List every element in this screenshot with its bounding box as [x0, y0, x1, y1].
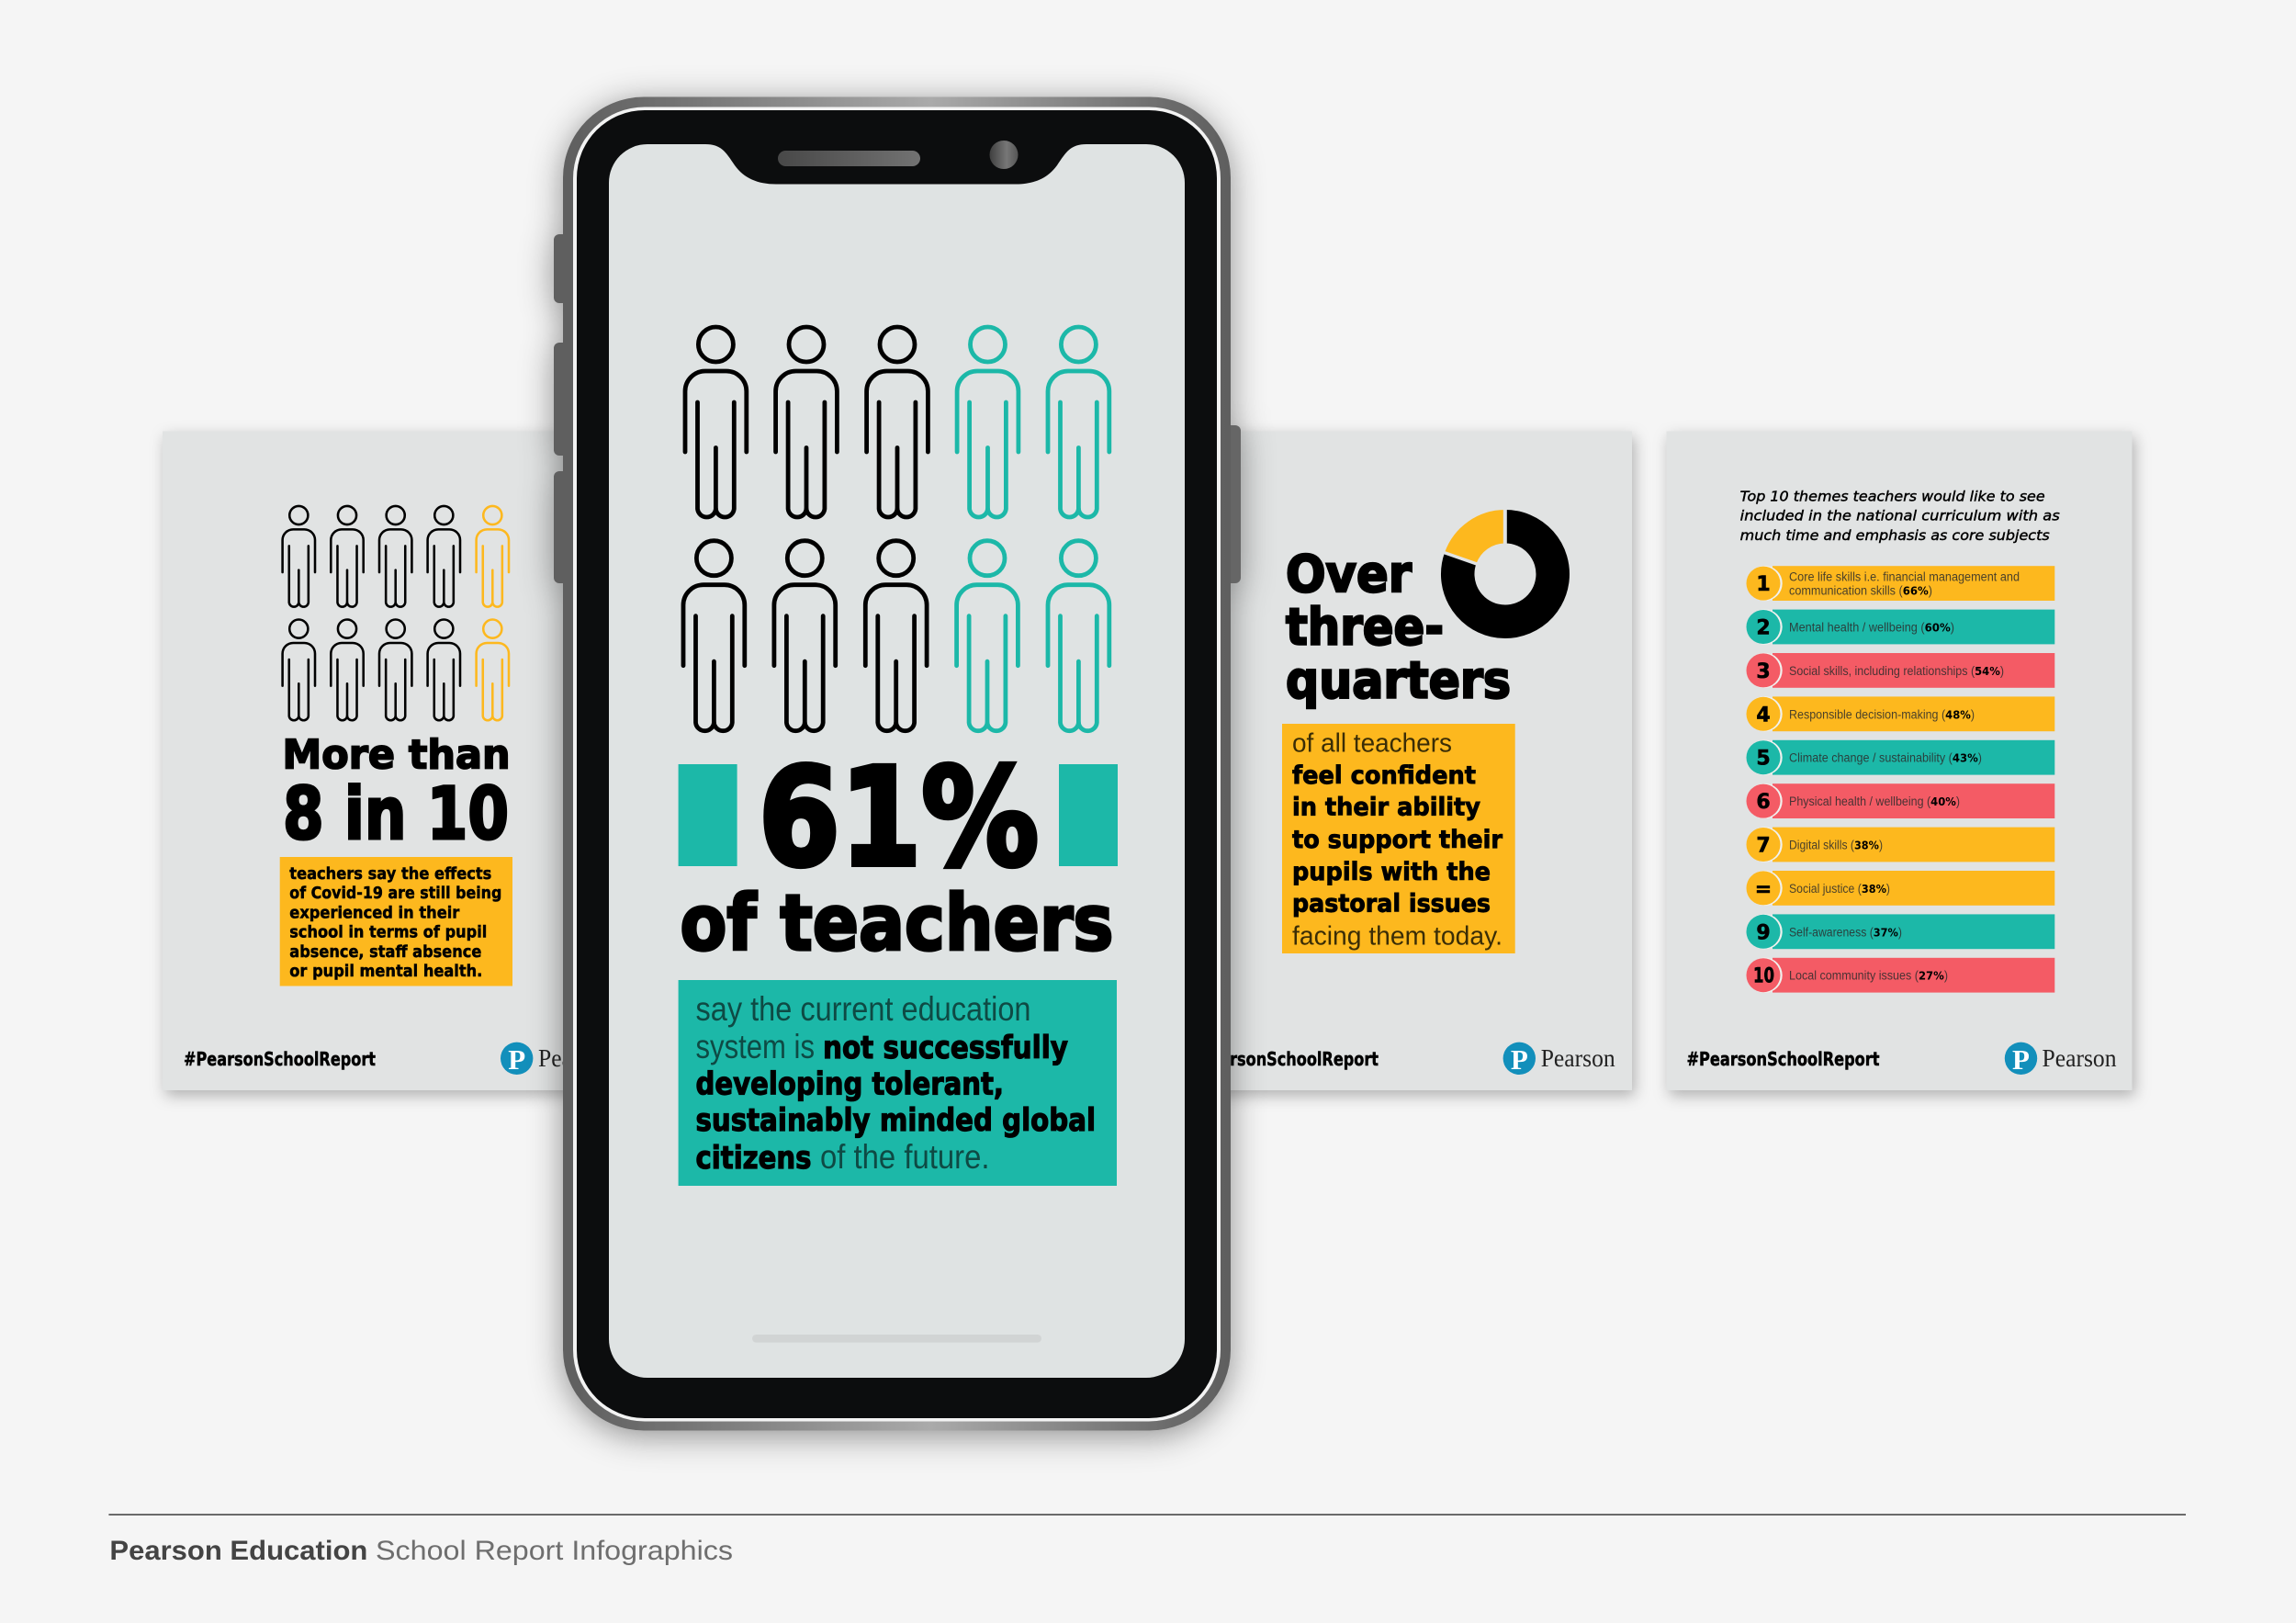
callout: amber text box: [1282, 724, 1515, 953]
hashtag: #PearsonSchoolReport: [1187, 1048, 1379, 1070]
row 6: 6: [1756, 791, 1771, 814]
heading: top 10 themes: [1740, 488, 2060, 544]
callout: amber text box: in their ability: [1292, 794, 1480, 821]
callout: teal text box: not successfully: [823, 1030, 1068, 1066]
callout: teal text box: say the current education: [696, 990, 1030, 1028]
row 4: Responsible decision-making (48%): [1789, 707, 1975, 721]
row 9: 9: [1756, 921, 1771, 944]
camera: [990, 141, 1018, 169]
row 1: [1747, 566, 2054, 601]
phone mockup: [554, 97, 1241, 1431]
logo: Pearson: P: [2012, 1043, 2030, 1076]
panel: card right, over three-quarters: [1166, 432, 1632, 1090]
callout: teal text box: [679, 980, 1117, 1186]
heading: Over three-quarters: Over: [1286, 545, 1412, 603]
row 8: =: [1755, 878, 1772, 901]
row 7: 7: [1756, 834, 1771, 858]
row 10: Local community issues (27%): [1789, 969, 1948, 983]
panel: card left, more than 8 in 10: [163, 432, 628, 1090]
row 5: 5: [1756, 748, 1771, 771]
heading: Over three-quarters: quarters: [1286, 651, 1511, 710]
callout: amber text box: or pupil mental health.: [289, 962, 482, 981]
headline: 61%: 61%: [759, 739, 1039, 896]
heading: Over three-quarters: [1286, 545, 1511, 710]
row 6: Physical health / wellbeing (40%): [1789, 795, 1960, 808]
phone screen: [609, 144, 1185, 1378]
callout: teal text box: sustainably minded global: [696, 1102, 1096, 1139]
icon group: ten people, six black and four teal: [683, 327, 1109, 731]
row 9: [1747, 914, 2054, 950]
phone body: [554, 97, 1241, 1431]
heading: top 10 themes: Top 10 themes teachers would like to see: [1740, 488, 2045, 504]
row 4: 4: [1756, 704, 1771, 727]
heading: 8 in 10: 8 in 10: [283, 773, 509, 856]
logo: Pearson: Pearson: [2043, 1044, 2117, 1072]
row 7: Digital skills (38%): [1789, 838, 1883, 852]
logo: Pearson: Pearson: [1541, 1044, 1615, 1072]
callout: amber text box: pastoral issues: [1292, 890, 1491, 919]
logo: Pearson: P: [508, 1043, 525, 1076]
callout: amber text box: experienced in their: [289, 903, 459, 922]
home indicator: [752, 1335, 1041, 1343]
hashtag: #PearsonSchoolReport: [1686, 1048, 1880, 1070]
footer title bold: Pearson Education: [109, 1536, 367, 1566]
callout: amber text box: feel confident: [1292, 761, 1476, 790]
row 5: Climate change / sustainability (43%): [1789, 751, 1982, 765]
callout: amber text box: teachers say the effects: [289, 864, 491, 884]
callout: teal text box: of the future.: [820, 1138, 990, 1176]
logo: Pearson: P: [1511, 1043, 1528, 1076]
callout: amber text box: pupils with the: [1292, 858, 1491, 886]
callout: amber text box: of all teachers: [1292, 729, 1452, 759]
heading: top 10 themes: much time and emphasis as core subjects: [1740, 527, 2050, 544]
logo: Pearson: [2005, 1043, 2117, 1076]
row 1: 1: [1756, 573, 1771, 596]
row 10: 10: [1753, 965, 1774, 988]
donut chart: [1437, 507, 1553, 622]
teal block left: [679, 764, 737, 866]
row 3: 3: [1756, 660, 1771, 683]
row 1: communication skills (66%): [1789, 583, 1932, 597]
row 4: [1747, 696, 2054, 731]
callout: amber text box: of Covid-19 are still being: [289, 884, 501, 903]
row 10: [1747, 957, 2054, 993]
panel: card far right, top 10 themes: [1666, 432, 2133, 1090]
callout: teal text box: citizens: [696, 1140, 812, 1177]
heading: More than: More than: [283, 731, 511, 779]
callout: teal text box: system is: [696, 1028, 815, 1065]
row 5: [1747, 740, 2054, 775]
row 3: [1747, 653, 2054, 688]
callout: amber text box: facing them today.: [1292, 922, 1503, 952]
row 8: Social justice (38%): [1789, 882, 1890, 896]
row 2: [1747, 609, 2054, 645]
footer: [108, 1514, 2186, 1566]
speaker: [778, 151, 920, 166]
teal block right: [1059, 764, 1118, 866]
logo: Pearson: [1503, 1043, 1615, 1076]
hashtag: #PearsonSchoolReport: [184, 1048, 376, 1070]
callout: amber text box: to support their: [1292, 826, 1503, 854]
ranked list: [1747, 566, 2054, 993]
logo: Pearson: [501, 1043, 613, 1076]
row 6: [1747, 783, 2054, 818]
phone notch: [705, 141, 1086, 184]
row 2: 2: [1756, 617, 1771, 639]
row 2: Mental health / wellbeing (60%): [1789, 621, 1954, 634]
callout: amber text box: absence, staff absence: [289, 942, 481, 962]
row 3: Social skills, including relationships (54%): [1789, 664, 2004, 678]
heading: Over three-quarters: three-: [1286, 598, 1444, 657]
row 1: Core life skills i.e. financial management and: [1789, 570, 2020, 584]
heading: top 10 themes: included in the national curriculum with as: [1740, 508, 2060, 524]
row 7: [1747, 827, 2054, 862]
footer title light: School Report Infographics: [376, 1536, 733, 1566]
row 9: Self-awareness (37%): [1789, 925, 1902, 939]
callout: amber text box: school in terms of pupil: [289, 923, 487, 942]
callout: amber text box: [280, 857, 512, 986]
icon group: ten people, eight black and two amber: [283, 506, 509, 720]
logo: Pearson: Pearson: [538, 1044, 613, 1072]
callout: teal text box: developing tolerant,: [696, 1065, 1004, 1102]
headline: of teachers: of teachers: [680, 878, 1113, 968]
row 8: [1747, 871, 2054, 906]
